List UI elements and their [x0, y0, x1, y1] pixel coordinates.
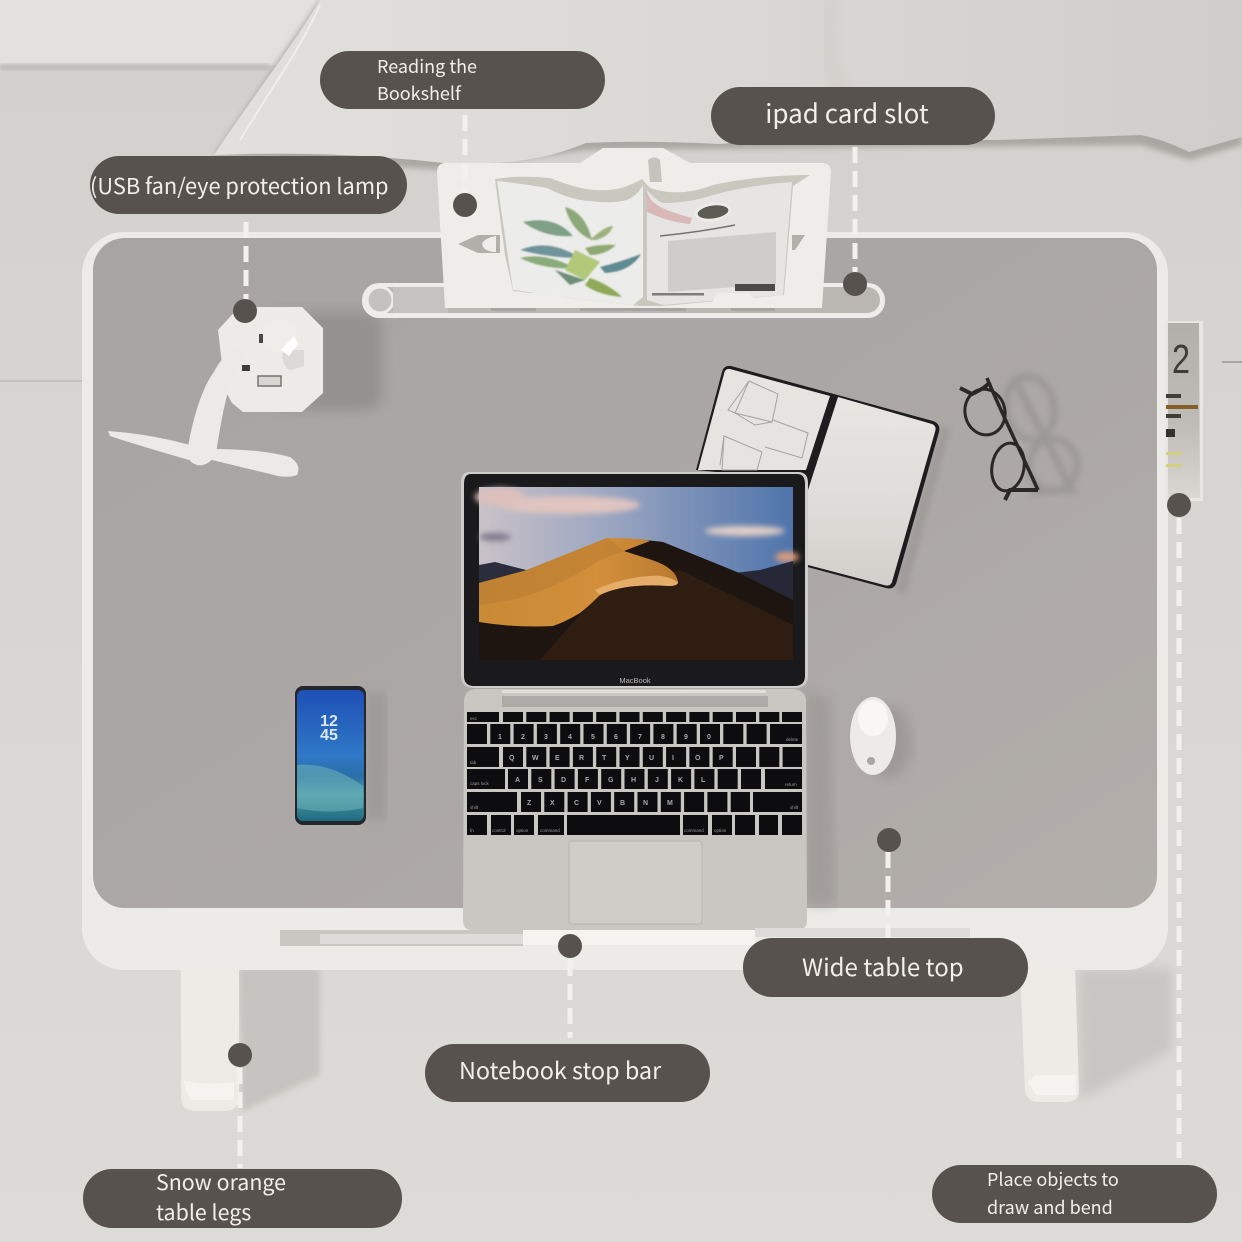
label: USB fan/eye protection lamp — [90, 156, 407, 214]
label: Notebook stop bar: Notebook stop bar — [459, 1052, 662, 1086]
pillow and duvet — [214, 0, 1242, 163]
lamp head — [282, 350, 304, 370]
keyboard: ZXCVBNM — [527, 800, 673, 807]
keyboard: command — [684, 828, 704, 833]
label: Reading the Bookshelf: Bookshelf — [377, 80, 462, 106]
notebook stop bar — [280, 928, 970, 946]
label: Snow orange table legs: Snow orange — [156, 1166, 286, 1197]
book stand bar — [362, 283, 885, 318]
label: Notebook stop bar — [425, 1044, 710, 1102]
keyboard: delete — [786, 737, 799, 742]
label: Place objects to draw and bend: Place objects to — [987, 1166, 1119, 1192]
label: Place objects to draw and bend: draw and bend — [987, 1194, 1113, 1220]
glasses shadow — [1000, 372, 1077, 492]
label: Snow orange table legs — [83, 1166, 402, 1228]
right page — [647, 182, 792, 305]
keyboard: caps lock — [470, 781, 490, 786]
keyboard: shift — [790, 805, 799, 810]
phone: 45 — [320, 727, 338, 744]
keyboard: option — [516, 828, 529, 833]
label: ipad card slot: ipad card slot — [765, 94, 929, 131]
fan blades — [108, 431, 190, 460]
label: Wide table top: Wide table top — [802, 948, 964, 983]
table mat — [93, 238, 1157, 908]
open book — [495, 175, 810, 306]
leaf illustration — [520, 207, 641, 297]
keyboard: shift — [470, 805, 479, 810]
side pull-out tray — [1165, 321, 1203, 501]
fan arm — [187, 349, 244, 465]
reading bookshelf — [437, 148, 831, 311]
USB fan and lamp — [108, 307, 323, 477]
keyboard: ASDFGHJKL — [515, 777, 706, 784]
label: Reading the Bookshelf: Reading the — [377, 53, 477, 79]
fan base shadow — [270, 312, 382, 410]
label: Snow orange table legs: table legs — [156, 1196, 251, 1227]
mouse — [850, 697, 912, 778]
side pull-out tray: 2 — [1172, 336, 1190, 382]
base plate — [218, 307, 323, 412]
table frame — [82, 232, 1168, 970]
callout dots — [228, 193, 1191, 1067]
glasses — [960, 372, 1077, 500]
label: Place objects to draw and bend — [932, 1165, 1217, 1223]
table leg right — [1020, 968, 1172, 1102]
laptop — [461, 472, 808, 930]
label: USB fan/eye protection lamp: (USB fan/eye protection lamp — [90, 170, 389, 201]
left page — [497, 181, 643, 305]
trackpad — [569, 841, 702, 924]
table leg left — [181, 968, 320, 1112]
callout lines — [240, 115, 1179, 1168]
keyboard: return — [785, 782, 797, 787]
laptop: MacBook — [619, 676, 651, 685]
keyboard: QWERTYUIOP — [509, 755, 724, 762]
keyboard: command — [540, 828, 560, 833]
label: Wide table top — [743, 938, 1028, 997]
page text — [652, 225, 776, 296]
phone: 12 — [320, 713, 338, 730]
keyboard: control — [492, 828, 506, 833]
label: ipad card slot — [711, 87, 995, 145]
keyboard: fn — [470, 828, 474, 833]
keyboard: 1234567890 — [498, 734, 711, 741]
notebook shadow — [895, 425, 950, 595]
keyboard: esc — [470, 716, 478, 721]
keyboard: option — [714, 828, 727, 833]
laptop base — [463, 689, 807, 930]
laptop screen wallpaper — [475, 487, 799, 660]
laptop lid — [461, 472, 808, 688]
keyboard: tab — [470, 760, 477, 765]
phone — [295, 686, 386, 825]
label: Reading the Bookshelf — [320, 51, 605, 109]
keyboard — [467, 712, 802, 835]
laptop shadow — [806, 690, 835, 905]
notebook — [696, 366, 939, 588]
